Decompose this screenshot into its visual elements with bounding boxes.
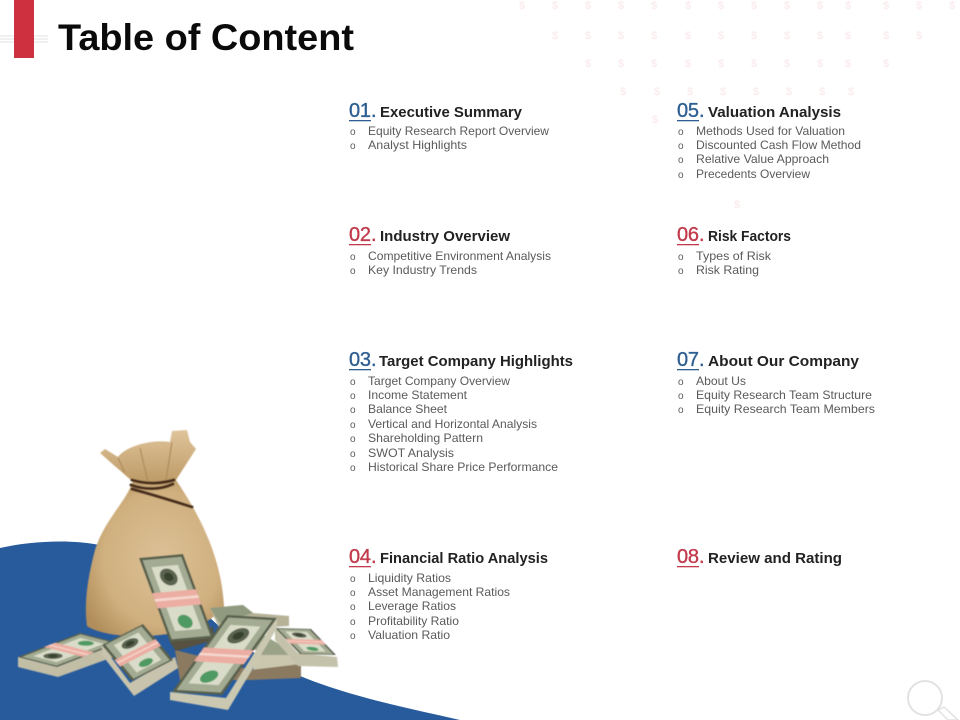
section 03: Target Company Highlights: o: [350, 391, 356, 402]
section 03: Target Company Highlights: Target Company Highlights: [379, 353, 573, 370]
section 02: Industry Overview: o: [350, 252, 356, 263]
background dollar sign pattern: $: [916, 0, 922, 12]
section 05: Valuation Analysis: .: [699, 100, 705, 122]
background dollar sign pattern: $: [784, 30, 790, 42]
background dollar sign pattern: $: [519, 0, 525, 12]
section 06: Risk Factors: Types of Risk: [696, 249, 772, 263]
background dollar sign pattern: $: [685, 58, 691, 70]
section 07: About Our Company: About Our Company: [708, 353, 860, 370]
section 07: About Our Company: Equity Research Team Members: [696, 402, 875, 416]
section 04: Financial Ratio Analysis: Asset Management Ratios: [368, 585, 510, 599]
section 07: About Our Company: 07: [677, 349, 699, 371]
background dollar sign pattern: $: [949, 0, 955, 12]
background dollar sign pattern: $: [817, 58, 823, 70]
section 05: Valuation Analysis: Relative Value Approach: [696, 152, 829, 166]
section 04: Financial Ratio Analysis: Liquidity Ratios: [368, 571, 451, 585]
background dollar sign pattern: $: [720, 86, 726, 98]
background dollar sign pattern: $: [845, 0, 851, 12]
background dollar sign pattern: $: [618, 30, 624, 42]
background dollar sign pattern: $: [718, 0, 724, 12]
background dollar sign pattern: $: [751, 58, 757, 70]
background dollar sign pattern: [519, 0, 955, 211]
background dollar sign pattern: $: [784, 58, 790, 70]
stack of bills: upright: [139, 554, 214, 651]
section 06: Risk Factors: 06: [677, 224, 699, 246]
stack of bills: left: [18, 633, 119, 677]
section 03: Target Company Highlights: Shareholding Pattern: [368, 431, 483, 445]
section 08: Review and Rating: 08: [677, 546, 699, 568]
section 05: Valuation Analysis: o: [678, 155, 684, 166]
background dollar sign pattern: $: [848, 86, 854, 98]
section 04: Financial Ratio Analysis: o: [350, 617, 356, 628]
background dollar sign pattern: $: [784, 0, 790, 12]
stack of bills: rear: [175, 605, 301, 680]
section 03: Target Company Highlights: Vertical and Horizontal Analysis: [368, 417, 537, 431]
section 04: Financial Ratio Analysis: .: [371, 546, 377, 568]
section 02: Industry Overview: 02: [349, 224, 371, 246]
section 05: Valuation Analysis: [677, 100, 861, 181]
section 05: Valuation Analysis: Precedents Overview: [696, 167, 810, 181]
section 04: Financial Ratio Analysis: o: [350, 588, 356, 599]
section 01: Executive Summary: Executive Summary: [380, 104, 523, 121]
section 06: Risk Factors: Risk Rating: [696, 263, 759, 277]
section 03: Target Company Highlights: o: [350, 420, 356, 431]
section 04: Financial Ratio Analysis: Valuation Ratio: [368, 628, 450, 642]
section 05: Valuation Analysis: o: [678, 127, 684, 138]
section 05: Valuation Analysis: 05: [677, 100, 699, 122]
section 01: Executive Summary: o: [350, 141, 356, 152]
section 07: About Our Company: o: [678, 377, 684, 388]
section 04: Financial Ratio Analysis: o: [350, 574, 356, 585]
background dollar sign pattern: $: [883, 30, 889, 42]
section 04: Financial Ratio Analysis: Financial Ratio Analysis: [380, 550, 548, 567]
section 04: Financial Ratio Analysis: o: [350, 631, 356, 642]
background dollar sign pattern: $: [552, 30, 558, 42]
section 08: Review and Rating: .: [699, 546, 705, 568]
background dollar sign pattern: $: [786, 86, 792, 98]
section 04: Financial Ratio Analysis: Profitability Ratio: [368, 614, 459, 628]
section 06: Risk Factors: o: [678, 266, 684, 277]
section 05: Valuation Analysis: Valuation Analysis: [708, 104, 841, 121]
background dollar sign pattern: $: [585, 58, 591, 70]
background dollar sign pattern: $: [651, 0, 657, 12]
background dollar sign pattern: $: [819, 86, 825, 98]
section 02: Industry Overview: Competitive Environment Analysis: [368, 249, 551, 263]
background dollar sign pattern: $: [845, 30, 851, 42]
background dollar sign pattern: $: [654, 86, 660, 98]
background dollar sign pattern: $: [651, 58, 657, 70]
background dollar sign pattern: $: [585, 0, 591, 12]
background dollar sign pattern: $: [883, 0, 889, 12]
section 01: Executive Summary: .: [371, 100, 377, 122]
background dollar sign pattern: $: [817, 30, 823, 42]
section 01: Executive Summary: [349, 100, 549, 152]
section 03: Target Company Highlights: 03: [349, 349, 371, 371]
section 03: Target Company Highlights: Target Company Overview: [368, 374, 510, 388]
section 08: Review and Rating: Review and Rating: [708, 550, 842, 567]
section 03: Target Company Highlights: o: [350, 405, 356, 416]
background dollar sign pattern: $: [652, 114, 658, 126]
section 07: About Our Company: .: [699, 349, 705, 371]
section 01: Executive Summary: Equity Research Report Overview: [368, 124, 549, 138]
section 03: Target Company Highlights: o: [350, 463, 356, 474]
background dollar sign pattern: $: [651, 30, 657, 42]
title: Table of Content: [58, 16, 355, 58]
background dollar sign pattern: $: [685, 30, 691, 42]
background dollar sign pattern: $: [685, 0, 691, 12]
icon: magnifying glass: [908, 681, 958, 720]
section 05: Valuation Analysis: Methods Used for Valuation: [696, 124, 845, 138]
section 03: Target Company Highlights: o: [350, 377, 356, 388]
section 03: Target Company Highlights: o: [350, 434, 356, 445]
section 03: Target Company Highlights: Income Statement: [368, 388, 468, 402]
background dollar sign pattern: $: [618, 0, 624, 12]
stack of bills: right: [275, 628, 338, 667]
section 02: Industry Overview: o: [350, 266, 356, 277]
section 04: Financial Ratio Analysis: o: [350, 602, 356, 613]
section 06: Risk Factors: Risk Factors: [708, 228, 791, 245]
background dollar sign pattern: $: [585, 30, 591, 42]
section 01: Executive Summary: 01: [349, 100, 371, 122]
section 04: Financial Ratio Analysis: 04: [349, 546, 371, 568]
background dollar sign pattern: $: [916, 30, 922, 42]
background dollar sign pattern: $: [751, 0, 757, 12]
background dollar sign pattern: $: [552, 0, 558, 12]
stack of bills: center left: [102, 624, 178, 696]
background dollar sign pattern: $: [753, 86, 759, 98]
section 08: Review and Rating: [677, 546, 842, 568]
section 06: Risk Factors: [677, 224, 791, 277]
section 07: About Our Company: [677, 349, 875, 416]
section 06: Risk Factors: o: [678, 252, 684, 263]
background dollar sign pattern: $: [687, 86, 693, 98]
blue wave background: [0, 541, 460, 720]
section 01: Executive Summary: o: [350, 127, 356, 138]
section 03: Target Company Highlights: SWOT Analysis: [368, 446, 454, 460]
background dollar sign pattern: $: [620, 86, 626, 98]
section 03: Target Company Highlights: Balance Sheet: [368, 402, 448, 416]
section 03: Target Company Highlights: .: [371, 349, 377, 371]
background dollar sign pattern: $: [718, 58, 724, 70]
section 02: Industry Overview: .: [371, 224, 377, 246]
icon: money bag with stacks of dollars: [18, 430, 338, 710]
background dollar sign pattern: $: [817, 0, 823, 12]
section 06: Risk Factors: .: [699, 224, 705, 246]
section 03: Target Company Highlights: [349, 349, 573, 474]
section 07: About Our Company: Equity Research Team Structure: [696, 388, 872, 402]
background dollar sign pattern: $: [883, 58, 889, 70]
background dollar sign pattern: $: [618, 58, 624, 70]
section 07: About Our Company: o: [678, 391, 684, 402]
section 04: Financial Ratio Analysis: [349, 546, 548, 642]
section 02: Industry Overview: Industry Overview: [380, 228, 510, 245]
section 07: About Our Company: o: [678, 405, 684, 416]
background dollar sign pattern: $: [845, 58, 851, 70]
header accent lines: [0, 36, 48, 42]
section 03: Target Company Highlights: Historical Share Price Performance: [368, 460, 558, 474]
icon: burlap sack: [86, 430, 224, 636]
stack of bills: front: [170, 615, 277, 710]
section 01: Executive Summary: Analyst Highlights: [368, 138, 467, 152]
background dollar sign pattern: $: [734, 199, 740, 211]
section 05: Valuation Analysis: o: [678, 141, 684, 152]
section 02: Industry Overview: Key Industry Trends: [368, 263, 477, 277]
section 07: About Our Company: About Us: [696, 374, 746, 388]
section 02: Industry Overview: [349, 224, 551, 277]
background dollar sign pattern: $: [751, 30, 757, 42]
background dollar sign pattern: $: [718, 30, 724, 42]
red title accent bar: [14, 0, 34, 58]
section 03: Target Company Highlights: o: [350, 449, 356, 460]
section 05: Valuation Analysis: o: [678, 170, 684, 181]
section 05: Valuation Analysis: Discounted Cash Flow Method: [696, 138, 861, 152]
section 04: Financial Ratio Analysis: Leverage Ratios: [368, 599, 456, 613]
